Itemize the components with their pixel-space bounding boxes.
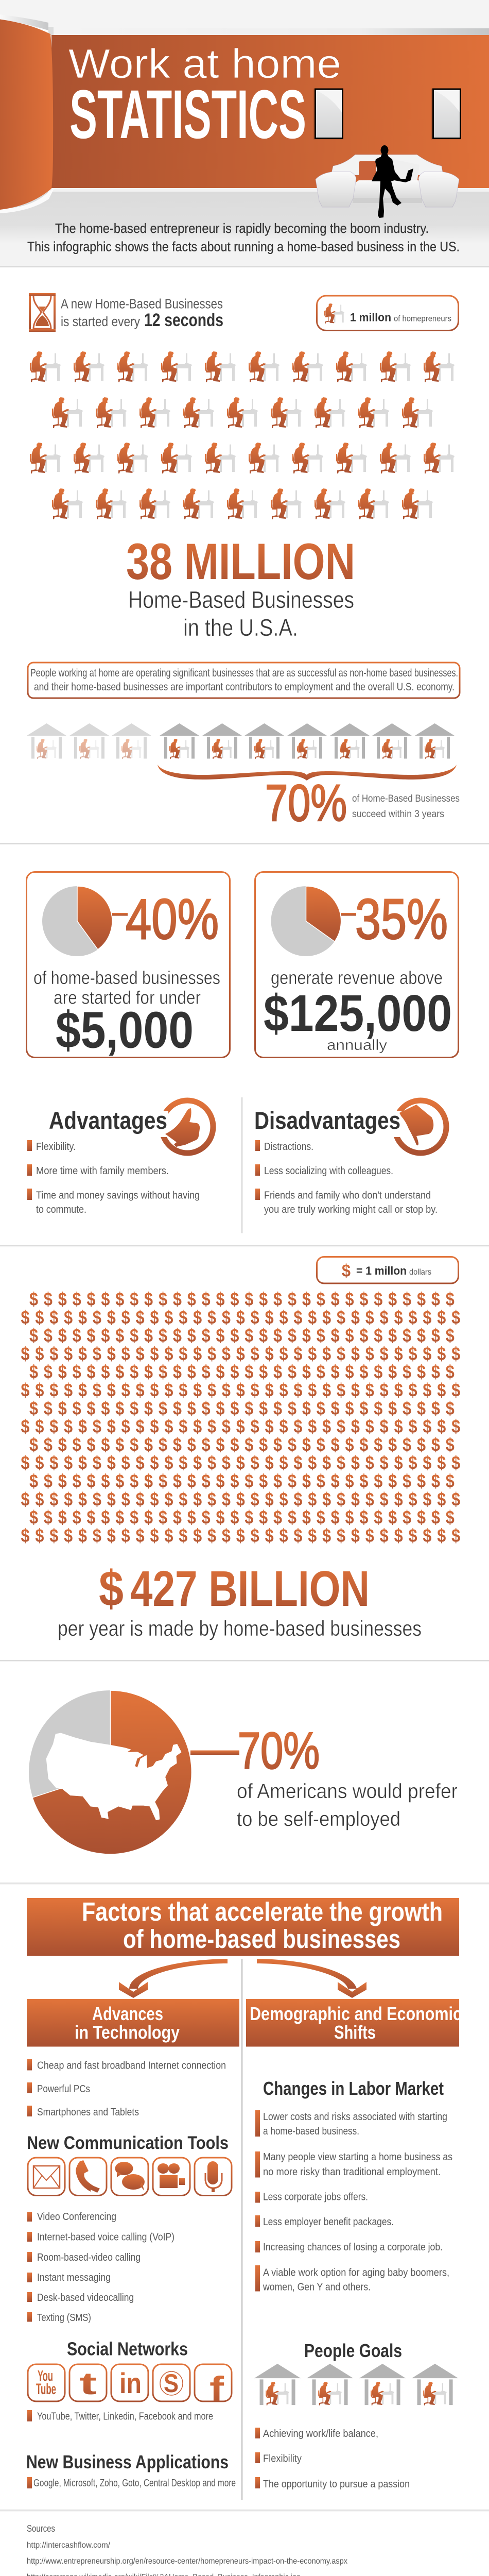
panel: advantages: More time with family members.	[36, 1165, 169, 1177]
stat: 70 percent self-employed: to be self-employed	[237, 1808, 400, 1831]
pictogram: dollar signs: $$$$$$$$$$$$$$$$$$$$$$$$$$$$$$	[29, 1471, 460, 1492]
list: communication tools: Room-based-video calling	[37, 2252, 141, 2263]
big stat: 427 billion: 427 BILLION	[130, 1561, 370, 1617]
sources: http://www.entrepreneurship.org/en/resource-center/homepreneurs-impact-on-the-economy.aspx	[27, 2557, 347, 2566]
legend: 1 million homepreneurs	[317, 296, 458, 331]
pie chart with US map	[29, 1690, 239, 1854]
section: changes in labor market	[255, 2078, 452, 2293]
header: advances in technology: in Technology	[75, 2022, 180, 2043]
arrow: left	[119, 1959, 228, 1998]
arrow: right	[257, 1959, 366, 1998]
icon: skype	[153, 2364, 190, 2401]
panel: 40 percent: are started for under	[54, 987, 201, 1008]
section: changes in labor market: Changes in Labor Market	[263, 2078, 444, 2099]
stat: 70 percent self-employed: 70%	[238, 1722, 320, 1780]
legend: 1 million dollars	[317, 1257, 458, 1283]
panel: advantages: Time and money savings without having	[36, 1190, 200, 1201]
section: new business applications: Google, Microsoft, Zoho, Goto, Central Desktop and more	[33, 2478, 236, 2489]
heading: factors: of home-based businesses	[123, 1924, 400, 1954]
pictogram: dollar signs: $$$$$$$$$$$$$$$$$$$$$$$$$$$$$$$	[21, 1380, 466, 1401]
pictogram: dollar signs: $$$$$$$$$$$$$$$$$$$$$$$$$$$$$$$	[21, 1453, 466, 1473]
icon: youtube: Tube	[36, 2381, 56, 2398]
pictogram: dollar signs: $$$$$$$$$$$$$$$$$$$$$$$$$$$$$$	[29, 1507, 460, 1528]
icon: phone	[69, 2158, 107, 2196]
new business every 12 seconds text	[61, 297, 223, 330]
icon: twitter: t	[79, 2366, 97, 2401]
icon: thumbs up	[153, 1100, 213, 1153]
intro text	[27, 221, 460, 255]
title: STATISTICS	[69, 76, 306, 153]
big stat: 38 million: 38 MILLION	[126, 533, 355, 590]
new business every 12 seconds text: A new Home-Based Businesses	[61, 297, 223, 311]
legend: 1 million dollars: = 1 millon	[356, 1264, 407, 1277]
big stat: 38 million: Home-Based Businesses	[128, 586, 354, 613]
list: technology: Cheap and fast broadband Internet connection	[37, 2060, 226, 2071]
stat: 70% succeed: succeed within 3 years	[352, 808, 444, 820]
panel: advantages	[27, 1100, 213, 1215]
header: demographic and economic shifts	[246, 1999, 462, 2046]
icon: twitter	[69, 2364, 107, 2401]
section: changes in labor market: Lower costs and risks associated with starting	[263, 2111, 447, 2123]
stat: 70% succeed	[265, 774, 460, 832]
section: new business applications: New Business Applications	[26, 2451, 229, 2472]
pictogram: dollar signs	[21, 1290, 466, 1547]
title	[68, 41, 341, 153]
sofa	[316, 155, 459, 207]
section: new business applications	[26, 2451, 236, 2489]
section: changes in labor market: a home-based business.	[263, 2126, 359, 2137]
list: communication tools: Internet-based voice calling (VoIP)	[37, 2232, 174, 2243]
big stat: 38 million: in the U.S.A.	[183, 614, 298, 641]
section: changes in labor market: Less corporate jobs offers.	[263, 2192, 368, 2203]
panel: disadvantages: Disadvantages	[254, 1107, 400, 1134]
panel: 40 percent: $5,000	[56, 1002, 194, 1059]
icon: microphone	[195, 2158, 232, 2196]
icon: youtube: You	[38, 2368, 53, 2384]
legend: 1 million homepreneurs: 1 millon	[350, 311, 391, 324]
big stat: 427 billion	[58, 1561, 422, 1640]
legend: 1 million dollars: $	[342, 1261, 351, 1281]
list: communication tools: Video Conferencing	[37, 2211, 116, 2223]
icon: hourglass	[29, 293, 56, 332]
section: changes in labor market: no more risky than traditional employment.	[263, 2166, 441, 2178]
heading: factors	[27, 1897, 459, 1956]
list: communication tools: Desk-based videocalling	[37, 2292, 134, 2303]
brace	[158, 765, 457, 781]
icon: thumbs down	[386, 1100, 446, 1153]
icon: facebook	[195, 2364, 232, 2409]
pictogram: dollar signs: $$$$$$$$$$$$$$$$$$$$$$$$$$$$$$	[29, 1326, 460, 1346]
panel: 35 percent: annually	[327, 1037, 388, 1054]
section: changes in labor market: Less employer benefit packages.	[263, 2216, 394, 2228]
section: changes in labor market: A viable work option for aging baby boomers,	[263, 2267, 449, 2278]
stat: 70% succeed: 70%	[265, 774, 347, 832]
panel: 40 percent	[27, 872, 230, 1059]
icon: email	[28, 2158, 65, 2196]
list: social networks: YouTube, Twitter, Linkedin, Facebook and more	[37, 2411, 213, 2422]
pictogram: dollar signs: $$$$$$$$$$$$$$$$$$$$$$$$$$$$$$	[29, 1362, 460, 1383]
pie chart: 40 percent	[42, 886, 128, 956]
callout: significant businesses	[28, 663, 460, 698]
sources: http://intercashflow.com/	[27, 2541, 111, 2550]
panel: 35 percent	[255, 872, 458, 1057]
icon: linkedin: in	[119, 2367, 142, 2399]
icon: skype: S	[164, 2369, 179, 2398]
pictogram: dollar signs: $$$$$$$$$$$$$$$$$$$$$$$$$$$$$$	[29, 1399, 460, 1419]
pictogram: ten houses	[27, 723, 455, 759]
pictogram: four houses	[254, 2364, 458, 2405]
list: people goals	[255, 2428, 410, 2490]
hero room illustration	[0, 0, 489, 268]
panel: advantages: Flexibility.	[36, 1141, 76, 1153]
icon: video camera	[153, 2158, 190, 2196]
icon: youtube	[28, 2364, 65, 2401]
header: demographic and economic shifts: Shifts	[334, 2022, 376, 2043]
pie chart: 35 percent	[271, 886, 356, 956]
pictogram: dollar signs: $$$$$$$$$$$$$$$$$$$$$$$$$$$$$$	[29, 1290, 460, 1310]
sources: Sources	[27, 2523, 55, 2534]
icon: linkedin	[111, 2364, 148, 2401]
list: communication tools: Texting (SMS)	[37, 2312, 91, 2324]
panel: 40 percent: of home-based businesses	[33, 967, 220, 988]
list: communication tools: Instant messaging	[37, 2272, 111, 2283]
big stat: 427 billion: per year is made by home-based businesses	[58, 1616, 422, 1640]
panel: disadvantages: Friends and family who don't understand	[264, 1190, 431, 1201]
frame left	[313, 89, 343, 140]
stat: 70 percent self-employed	[237, 1722, 458, 1831]
new business every 12 seconds text: 12 seconds	[144, 310, 223, 330]
pictogram: dollar signs: $$$$$$$$$$$$$$$$$$$$$$$$$$$$$$$	[21, 1308, 466, 1328]
panel: advantages: Advantages	[49, 1107, 167, 1134]
map: United States	[46, 1733, 182, 1820]
stat: 70 percent self-employed: of Americans would prefer	[237, 1780, 458, 1803]
list: technology: Smartphones and Tablets	[37, 2107, 139, 2118]
section: changes in labor market: Increasing chances of losing a corporate job.	[263, 2242, 443, 2253]
panel: 35 percent: generate revenue above	[271, 967, 443, 988]
panel: 35 percent: $125,000	[264, 985, 452, 1042]
pictogram: dollar signs: $$$$$$$$$$$$$$$$$$$$$$$$$$$$$$	[29, 1435, 460, 1455]
legend: 1 million dollars: dollars	[409, 1268, 431, 1277]
panel: 40 percent: 40%	[126, 888, 219, 951]
heading: social networks: Social Networks	[67, 2338, 188, 2360]
intro text: The home-based entrepreneur is rapidly becoming the boom industry.	[55, 221, 429, 236]
list: people goals: Achieving work/life balance,	[263, 2428, 378, 2439]
list: technology	[27, 2059, 226, 2118]
big stat: 427 billion: $	[99, 1561, 124, 1617]
title: Work at home	[68, 41, 341, 87]
person silhouette with laptop	[372, 145, 413, 218]
column	[0, 14, 54, 213]
list: people goals: Flexibility	[263, 2453, 302, 2465]
list: people goals: The opportunity to pursue a passion	[263, 2479, 410, 2490]
header: advances in technology	[27, 1999, 239, 2046]
icon: chat	[111, 2158, 148, 2196]
panel: disadvantages: Less socializing with colleagues.	[264, 1165, 393, 1177]
heading: people goals: People Goals	[304, 2340, 402, 2361]
frame right	[431, 89, 461, 140]
stat: 70% succeed: of Home-Based Businesses	[352, 793, 460, 804]
list: technology: Powerful PCs	[37, 2083, 90, 2095]
list: communication tools	[27, 2211, 174, 2324]
legend: 1 million homepreneurs: of homepreneurs	[394, 314, 451, 324]
section: changes in labor market: Many people view starting a home business as	[263, 2151, 452, 2163]
pictogram: dollar signs: $$$$$$$$$$$$$$$$$$$$$$$$$$$$$$$	[21, 1526, 466, 1547]
pictogram: dollar signs: $$$$$$$$$$$$$$$$$$$$$$$$$$$$$$$	[21, 1417, 466, 1437]
sources	[27, 2523, 433, 2576]
panel: 35 percent: 35%	[355, 888, 448, 951]
panel: disadvantages: you are truly working might call or stop by.	[264, 1204, 438, 1215]
pictogram: dollar signs: $$$$$$$$$$$$$$$$$$$$$$$$$$$$$$$	[21, 1489, 466, 1510]
big stat: 38 million	[126, 533, 355, 641]
new business every 12 seconds text: is started every	[61, 315, 140, 329]
heading: new communication tools: New Communication Tools	[27, 2133, 229, 2153]
pictogram: dollar signs: $$$$$$$$$$$$$$$$$$$$$$$$$$$$$$$	[21, 1344, 466, 1365]
icon: facebook: f	[209, 2369, 224, 2409]
pictogram grid: 38 homepreneurs	[30, 351, 455, 519]
panel: disadvantages	[254, 1100, 446, 1215]
header: advances in technology: Advances	[92, 2003, 163, 2024]
section: changes in labor market: women, Gen Y and others.	[263, 2281, 371, 2293]
panel: disadvantages: Distractions.	[264, 1141, 313, 1153]
panel: advantages: to commute.	[36, 1204, 86, 1215]
